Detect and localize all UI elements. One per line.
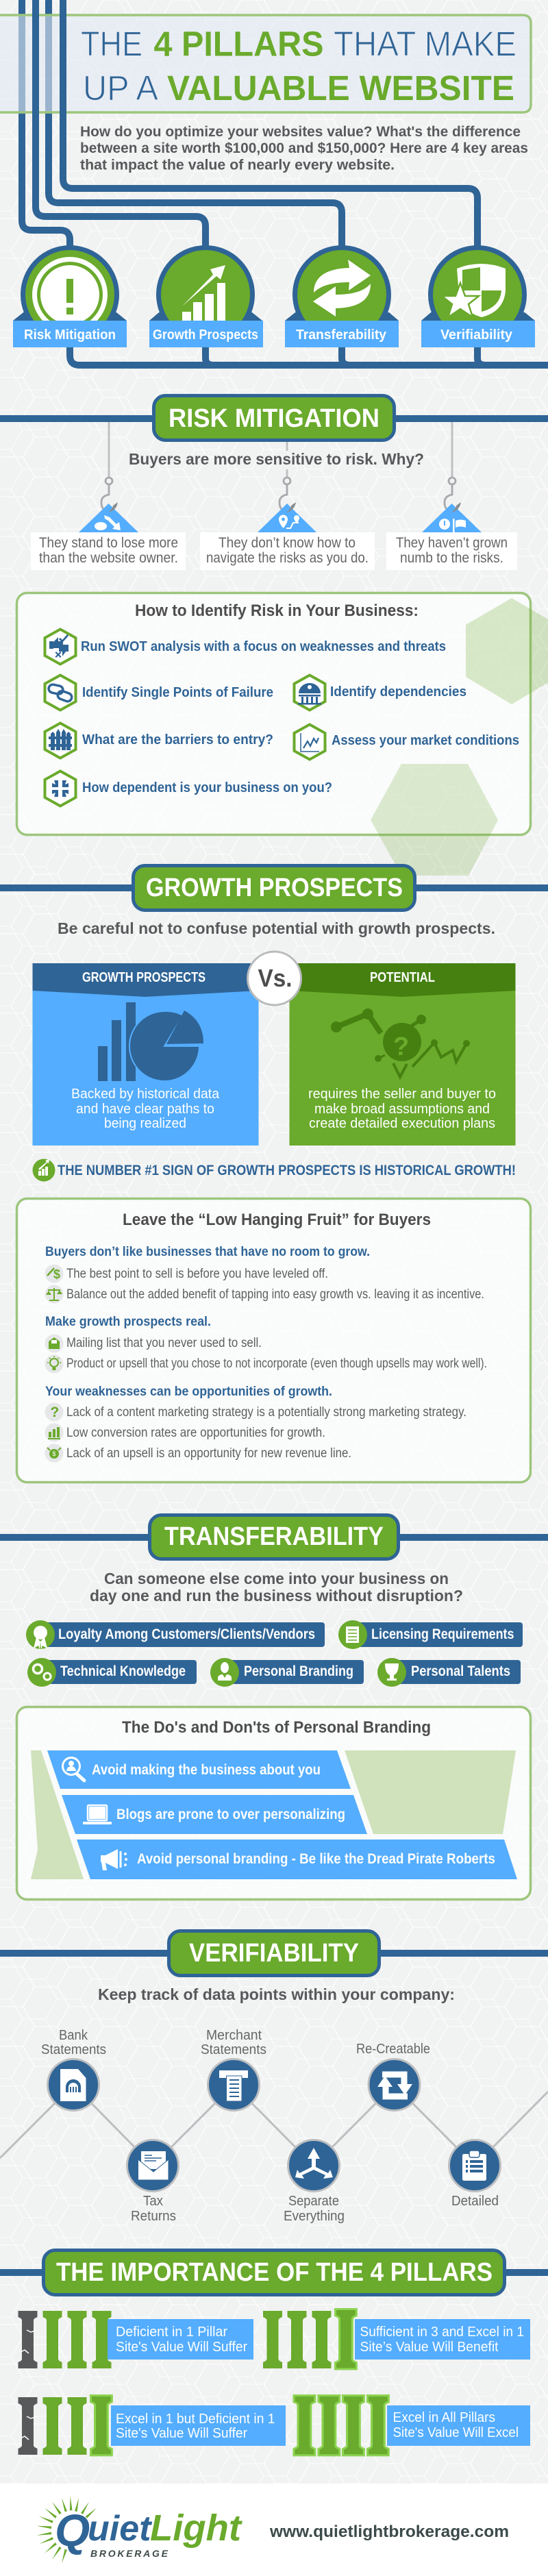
item: dependencies	[295, 676, 466, 710]
node: merchant statements	[201, 2028, 266, 2110]
list: no room to grow: Balance out the added benefit of tapping into easy growth vs. leaving it as incentive.	[66, 1287, 484, 1302]
zigzag line	[0, 2085, 548, 2166]
website url: www.quietlightbrokerage.com	[269, 2523, 509, 2541]
node: tax returns: Tax	[143, 2194, 163, 2209]
icon: revenue	[45, 1444, 63, 1462]
pipes over the title banner	[36, 0, 477, 248]
text: transferability question: Can someone else come into your business on	[104, 1570, 449, 1587]
pillar: verifiability	[421, 248, 535, 347]
panel: growth prospects comparison: and have clear paths to	[76, 1101, 214, 1117]
node: bank statements: Bank	[59, 2028, 88, 2043]
node: bank statements: Statements	[41, 2042, 106, 2057]
hook card: navigate risks: They don’t know how to	[219, 535, 356, 551]
logo: BROKERAGE	[90, 2548, 169, 2559]
icon: balance	[45, 1285, 63, 1303]
panel: potential comparison: requires the seller and buyer to	[308, 1086, 496, 1102]
callout: historical growth	[33, 1159, 516, 1181]
icon: shield and star	[442, 264, 506, 317]
icon: question	[45, 1403, 63, 1421]
title: 4 PILLARS	[153, 25, 323, 63]
icon: bars and pie	[98, 1002, 203, 1081]
intro text	[80, 124, 528, 173]
panel: growth prospects comparison	[33, 963, 259, 1145]
band: dread pirate roberts	[77, 1840, 517, 1879]
panel: growth prospects comparison: Backed by historical data	[71, 1086, 220, 1102]
title: THAT MAKE	[334, 25, 516, 63]
hook card: lose more: than the website owner.	[39, 550, 178, 566]
list: make prospects real: Make growth prospects real.	[45, 1315, 211, 1329]
section: verifiability	[0, 1931, 548, 2224]
section: transferability	[0, 1515, 548, 1899]
hook card: navigate risks: navigate the risks as you do.	[206, 550, 369, 566]
pill: technical knowledge: Technical Knowledge	[60, 1663, 186, 1679]
logo: Q	[55, 2505, 90, 2555]
panel: potential comparison: POTENTIAL	[370, 970, 435, 985]
hook card: numb to risks	[386, 422, 517, 570]
logo: uiet	[88, 2509, 153, 2549]
heading: personal branding: The Do's and Don'ts of Personal Branding	[122, 1718, 431, 1737]
item: barriers: What are the barriers to entry?	[82, 732, 273, 747]
outcome: excel in all: Excel in All Pillars	[393, 2410, 495, 2425]
pill: loyalty: Loyalty Among Customers/Clients/Vendors	[58, 1626, 315, 1642]
icon: revenue: $	[52, 1450, 56, 1457]
heading: identify risk: How to Identify Risk in Your Business:	[135, 602, 419, 620]
intro text: How do you optimize your websites value? What's the difference	[80, 124, 521, 140]
outcome: excel but deficient: Excel in 1 but Deficient in 1	[116, 2411, 275, 2427]
heading: transferability	[0, 1515, 548, 1559]
hook card: numb to risks: numb to the risks.	[400, 550, 503, 566]
section: risk mitigation	[0, 396, 548, 876]
band: dread pirate roberts: Avoid personal branding - Be like the Dread Pirate Roberts	[137, 1851, 495, 1867]
pillar: growth prospects: Growth Prospects	[153, 327, 258, 343]
heading: risk mitigation	[0, 396, 548, 440]
intro text: that impact the value of nearly every website.	[80, 158, 395, 173]
list: weaknesses as opportunities: Your weaknesses can be opportunities of growth.	[45, 1385, 332, 1399]
list: weaknesses as opportunities: Lack of an upsell is an opportunity for new revenue line.	[66, 1446, 351, 1461]
footer	[0, 2484, 548, 2576]
icon: mail	[45, 1335, 63, 1352]
band: about you: Avoid making the business about you	[92, 1762, 321, 1778]
pillar: transferability: Transferability	[296, 327, 387, 343]
heading: verifiability: VERIFIABILITY	[189, 1939, 359, 1968]
list: weaknesses as opportunities: Low conversion rates are opportunities for growth.	[66, 1425, 325, 1440]
text: transferability question	[90, 1570, 463, 1605]
item: single points of failure	[45, 676, 273, 710]
node: tax returns	[127, 2140, 178, 2224]
list: weaknesses as opportunities: Lack of a content marketing strategy is a potentially strong marketing strategy.	[66, 1404, 466, 1420]
item: swot: Run SWOT analysis with a focus on weaknesses and threats	[81, 639, 446, 654]
heading: growth prospects: GROWTH PROSPECTS	[146, 874, 403, 902]
panel: potential comparison: create detailed execution plans	[309, 1115, 495, 1131]
node: separate everything: Everything	[284, 2209, 345, 2224]
icon: sell point	[45, 1265, 63, 1283]
pillar: growth prospects	[149, 248, 263, 347]
outcome: sufficient in three: Sufficient in 3 and Excel in 1	[360, 2324, 524, 2340]
hook card: navigate risks	[200, 442, 375, 570]
item: market conditions	[295, 725, 519, 759]
section: growth prospects	[0, 866, 548, 1483]
list: no room to grow: Buyers don’t like businesses that have no room to grow.	[45, 1245, 370, 1259]
text: potential warning: Be careful not to confuse potential with growth prospects.	[58, 919, 495, 937]
icon: light bulb	[45, 1355, 63, 1373]
pillar: risk mitigation	[13, 248, 127, 347]
pill: personal talents: Personal Talents	[411, 1663, 510, 1679]
item: owner dependence: How dependent is your business on you?	[82, 780, 332, 795]
icon: map pins	[279, 515, 299, 528]
node: separate everything	[284, 2140, 345, 2224]
panel: potential comparison	[289, 963, 515, 1145]
node: merchant statements: Statements	[201, 2042, 266, 2057]
title: THE	[81, 25, 142, 63]
icon: bars	[45, 1424, 63, 1441]
outcome: excel but deficient	[18, 2395, 286, 2455]
outcome: sufficient in three	[263, 2309, 530, 2369]
bottom pipe joining the pillars	[70, 343, 548, 365]
heading: risk mitigation: RISK MITIGATION	[169, 404, 379, 433]
list: no room to grow	[45, 1245, 484, 1303]
outcome: excel in all: Site's Value Will Excel	[393, 2425, 519, 2440]
heading: growth prospects	[0, 866, 548, 910]
versus badge	[248, 952, 301, 1005]
band: about you	[47, 1750, 351, 1789]
pill: personal branding: Personal Branding	[244, 1663, 353, 1679]
pipes behind the title banner	[22, 0, 342, 248]
panel: low hanging fruit	[16, 1199, 530, 1483]
logo: Light	[150, 2507, 242, 2549]
pillar: verifiability: Verifiability	[440, 327, 513, 343]
node: detailed	[449, 2140, 500, 2209]
text: keep track: Keep track of data points within your company:	[98, 1985, 455, 2003]
item: barriers	[45, 723, 273, 758]
title: UP A	[83, 69, 158, 108]
outcome: sufficient in three: Site’s Value Will Benefit	[360, 2339, 499, 2355]
node: tax returns: Returns	[131, 2209, 176, 2224]
outcome: deficient in one: Site's Value Will Suffer	[116, 2339, 247, 2355]
icon: uncertain path	[331, 1008, 470, 1077]
icon: sun rays	[36, 2496, 97, 2564]
node: detailed: Detailed	[451, 2194, 499, 2209]
panel: identify risk	[16, 593, 548, 876]
outcome: excel but deficient: Site's Value Will Suffer	[116, 2425, 247, 2441]
item: single points of failure: Identify Single Points of Failure	[82, 685, 273, 700]
item: market conditions: Assess your market conditions	[332, 733, 519, 748]
heading: importance of the pillars	[0, 2250, 548, 2295]
icon: warning	[32, 257, 108, 332]
item: dependencies: Identify dependencies	[330, 684, 466, 699]
band: blogs: Blogs are prone to over personalizing	[116, 1807, 345, 1822]
pillar: risk mitigation: Risk Mitigation	[24, 327, 116, 343]
pill: licensing	[338, 1620, 523, 1649]
item: owner dependence	[45, 771, 332, 806]
icon: question: ?	[51, 1404, 59, 1420]
pill: technical knowledge	[27, 1658, 197, 1687]
pill: loyalty	[26, 1620, 325, 1650]
panel: growth prospects comparison: GROWTH PROSPECTS	[82, 970, 206, 985]
icon: sell point: $	[53, 1267, 60, 1281]
logo	[36, 2496, 242, 2564]
hook card: lose more	[31, 422, 186, 570]
outcome: excel in all	[294, 2395, 530, 2455]
panel: potential comparison: ?	[393, 1032, 409, 1061]
node: bank statements	[41, 2028, 106, 2110]
hook card: numb to risks: They haven’t grown	[396, 535, 508, 551]
item: swot	[45, 629, 446, 665]
heading: verifiability	[0, 1931, 548, 1976]
title: VALUABLE WEBSITE	[167, 69, 514, 108]
icon: alert and flag	[439, 519, 466, 532]
heading: transferability: TRANSFERABILITY	[164, 1522, 384, 1551]
node: re-creatable: Re-Creatable	[356, 2042, 430, 2057]
intro text: between a site worth $100,000 and $150,000? Here are 4 key areas	[80, 140, 528, 156]
outcome: deficient in one	[18, 2311, 253, 2368]
heading: importance of the pillars: THE IMPORTANCE OF THE 4 PILLARS	[56, 2258, 493, 2287]
section: importance of the pillars	[0, 2250, 548, 2455]
panel: growth prospects comparison: being realized	[104, 1115, 186, 1131]
node: separate everything: Separate	[288, 2194, 339, 2209]
text: transferability question: day one and run the business without disruption?	[90, 1587, 463, 1605]
band: blogs	[62, 1795, 367, 1834]
heading: low hanging fruit: Leave the “Low Hanging Fruit” for Buyers	[123, 1211, 431, 1229]
title banner	[0, 15, 531, 112]
pillar: transferability	[285, 248, 399, 347]
list: make prospects real	[45, 1315, 487, 1373]
list: make prospects real: Mailing list that you never used to sell.	[66, 1335, 262, 1350]
outcome: deficient in one: Deficient in 1 Pillar	[116, 2324, 227, 2340]
pill: personal talents	[377, 1658, 521, 1687]
node: merchant statements: Merchant	[206, 2028, 262, 2043]
node: re-creatable	[356, 2042, 430, 2110]
title	[81, 25, 516, 108]
text: buyers question: Buyers are more sensitive to risk. Why?	[129, 450, 424, 468]
versus badge: Vs.	[258, 964, 292, 992]
icon: growth chart	[182, 265, 225, 321]
pill: personal branding	[210, 1658, 364, 1687]
panel: potential comparison: make broad assumptions and	[314, 1101, 490, 1117]
list: no room to grow: The best point to sell is before you have leveled off.	[66, 1266, 328, 1281]
icon: coins and falling arrow	[95, 515, 121, 530]
panel: personal branding	[16, 1707, 530, 1899]
hook card: lose more: They stand to lose more	[39, 535, 178, 551]
icon: transfer arrows	[313, 260, 371, 317]
list: weaknesses as opportunities	[45, 1385, 466, 1462]
pill: licensing: Licensing Requirements	[371, 1626, 514, 1642]
